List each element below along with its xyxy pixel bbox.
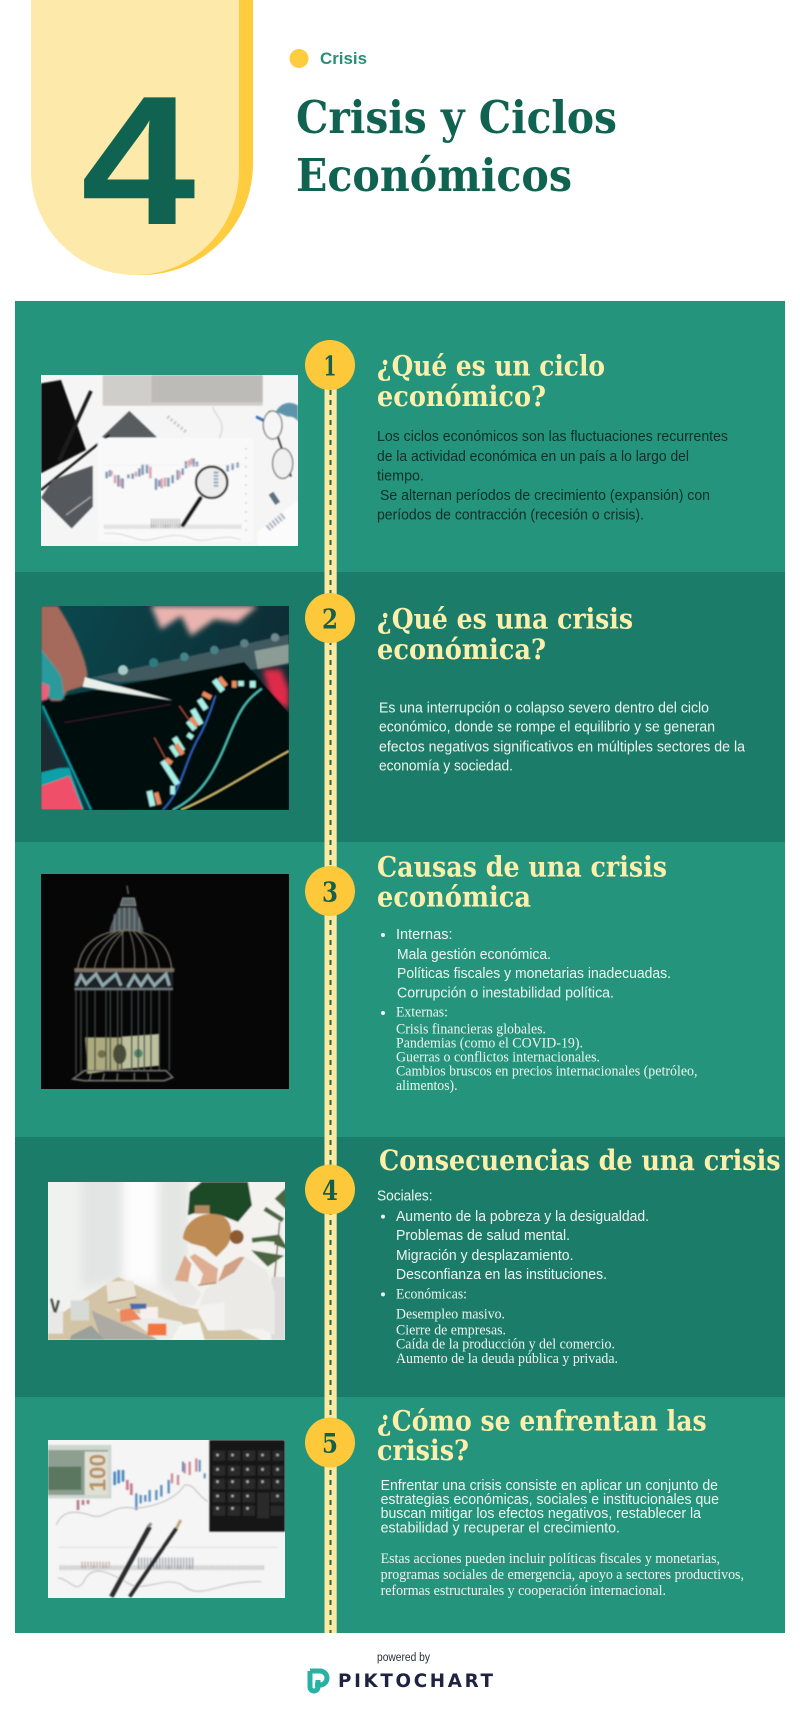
icon: Piktochart logo xyxy=(310,1671,327,1691)
consequences list: Migración y desplazamiento. xyxy=(396,1248,574,1264)
heading: Causas de una crisis xyxy=(377,851,667,884)
causes list: Guerras o conflictos internacionales. xyxy=(396,1050,600,1066)
badge 4: 4 xyxy=(322,1176,338,1207)
badge 2: 2 xyxy=(322,604,338,636)
consequences list: Económicas: xyxy=(396,1286,467,1302)
panel: section 4 consecuencias xyxy=(15,1137,785,1397)
panel: section 1 ciclo económico xyxy=(15,301,785,572)
causes list: Corrupción o inestabilidad política. xyxy=(397,986,614,1002)
body text: Enfrentar una crisis consiste en aplicar un conjunto de xyxy=(381,1478,718,1494)
title xyxy=(296,91,617,202)
photo: calculator, banknote and charts: 100 xyxy=(84,1454,110,1492)
body text: económico, donde se rompe el equilibrio y se generan xyxy=(379,720,715,736)
causes list: Mala gestión económica. xyxy=(397,947,551,963)
body text: estrategias económicas, sociales e institucionales que xyxy=(381,1492,719,1508)
consequences list xyxy=(377,1189,649,1367)
body text: períodos de contracción (recesión o crisis). xyxy=(377,508,644,524)
causes list: Pandemias (como el COVID-19). xyxy=(396,1036,583,1052)
title: Económicos xyxy=(296,149,572,202)
causes list xyxy=(381,927,698,1094)
body text: estabilidad y recuperar el crecimiento. xyxy=(381,1520,620,1536)
badge 1 xyxy=(305,340,355,390)
consequences list: Caída de la producción y del comercio. xyxy=(396,1337,615,1353)
consequences list: Sociales: xyxy=(377,1189,433,1205)
badge 3 xyxy=(305,866,355,916)
badge 1: 1 xyxy=(324,352,336,382)
photo: trading chart on tablet xyxy=(41,606,289,810)
panel: section 3 causas xyxy=(15,842,785,1137)
badge 5 xyxy=(305,1418,355,1468)
body text: Se alternan períodos de crecimiento (expansión) con xyxy=(380,488,710,504)
heading: ¿Qué es una crisis xyxy=(377,602,633,636)
body text: Los ciclos económicos son las fluctuaciones recurrentes xyxy=(377,429,728,445)
badge 5: 5 xyxy=(322,1429,338,1460)
body text: Es una interrupción o colapso severo dentro del ciclo xyxy=(379,700,709,716)
heading: económico? xyxy=(377,380,546,413)
photo: calculator, banknote and charts xyxy=(48,1440,285,1598)
body text: tiempo. xyxy=(377,468,424,484)
causes list: alimentos). xyxy=(396,1078,458,1094)
heading xyxy=(377,851,667,914)
causes list: Crisis financieras globales. xyxy=(396,1022,546,1038)
footer: powered by Piktochart: PIKTOCHART xyxy=(338,1671,494,1692)
body text: de la actividad económica en un país a lo largo del xyxy=(377,449,689,465)
body text xyxy=(381,1478,744,1599)
consequences list: Cierre de empresas. xyxy=(396,1322,506,1338)
heading: ¿Qué es un ciclo xyxy=(377,350,605,382)
badge 3: 3 xyxy=(322,878,338,908)
title: Crisis y Ciclos xyxy=(296,91,617,144)
photo: charts and magnifier on desk xyxy=(41,375,298,546)
consequences list: Problemas de salud mental. xyxy=(396,1228,570,1244)
body text xyxy=(377,429,728,524)
category tag: Crisis: Crisis xyxy=(320,49,367,68)
footer: powered by Piktochart xyxy=(310,1652,494,1692)
heading xyxy=(377,602,633,666)
panel: section 2 crisis económica xyxy=(15,572,785,842)
heading: crisis? xyxy=(377,1434,469,1467)
photo: stressed woman at desk xyxy=(48,1182,285,1340)
body text: Estas acciones pueden incluir políticas fiscales y monetarias, xyxy=(381,1551,720,1567)
heading: económica xyxy=(377,881,531,914)
causes list: Políticas fiscales y monetarias inadecuadas. xyxy=(397,966,671,982)
photo: birdcage with dollar bill xyxy=(41,874,289,1089)
heading: ¿Cómo se enfrentan las xyxy=(377,1404,707,1438)
consequences list: Desconfianza en las instituciones. xyxy=(396,1267,607,1283)
body text: economía y sociedad. xyxy=(379,758,513,774)
causes list: Cambios bruscos en precios internacionales (petróleo, xyxy=(396,1064,698,1080)
causes list: Internas: xyxy=(396,927,452,943)
body text: reformas estructurales y cooperación internacional. xyxy=(381,1583,666,1599)
heading xyxy=(377,350,605,413)
heading: económica? xyxy=(377,633,546,666)
header banner with number 4 xyxy=(31,0,253,275)
consequences list: Aumento de la deuda pública y privada. xyxy=(396,1351,618,1367)
body text: buscan mitigar los efectos negativos, restablecer la xyxy=(381,1506,702,1522)
body text: efectos negativos significativos en múltiples sectores de la xyxy=(379,739,746,755)
badge 2 xyxy=(305,593,355,643)
body text xyxy=(379,700,746,774)
causes list: Externas: xyxy=(396,1004,448,1020)
footer: powered by Piktochart: powered by xyxy=(377,1652,430,1664)
consequences list: Desempleo masivo. xyxy=(396,1306,505,1322)
badge 4 xyxy=(305,1164,355,1214)
body text: programas sociales de emergencia, apoyo a sectores productivos, xyxy=(381,1567,744,1583)
category tag: Crisis xyxy=(290,49,367,68)
panel: section 5 cómo se enfrentan xyxy=(15,1397,785,1633)
heading xyxy=(377,1404,707,1467)
big number 4: 4 xyxy=(81,58,196,264)
timeline with numbered badges xyxy=(305,340,355,1633)
consequences list: Aumento de la pobreza y la desigualdad. xyxy=(396,1209,649,1225)
